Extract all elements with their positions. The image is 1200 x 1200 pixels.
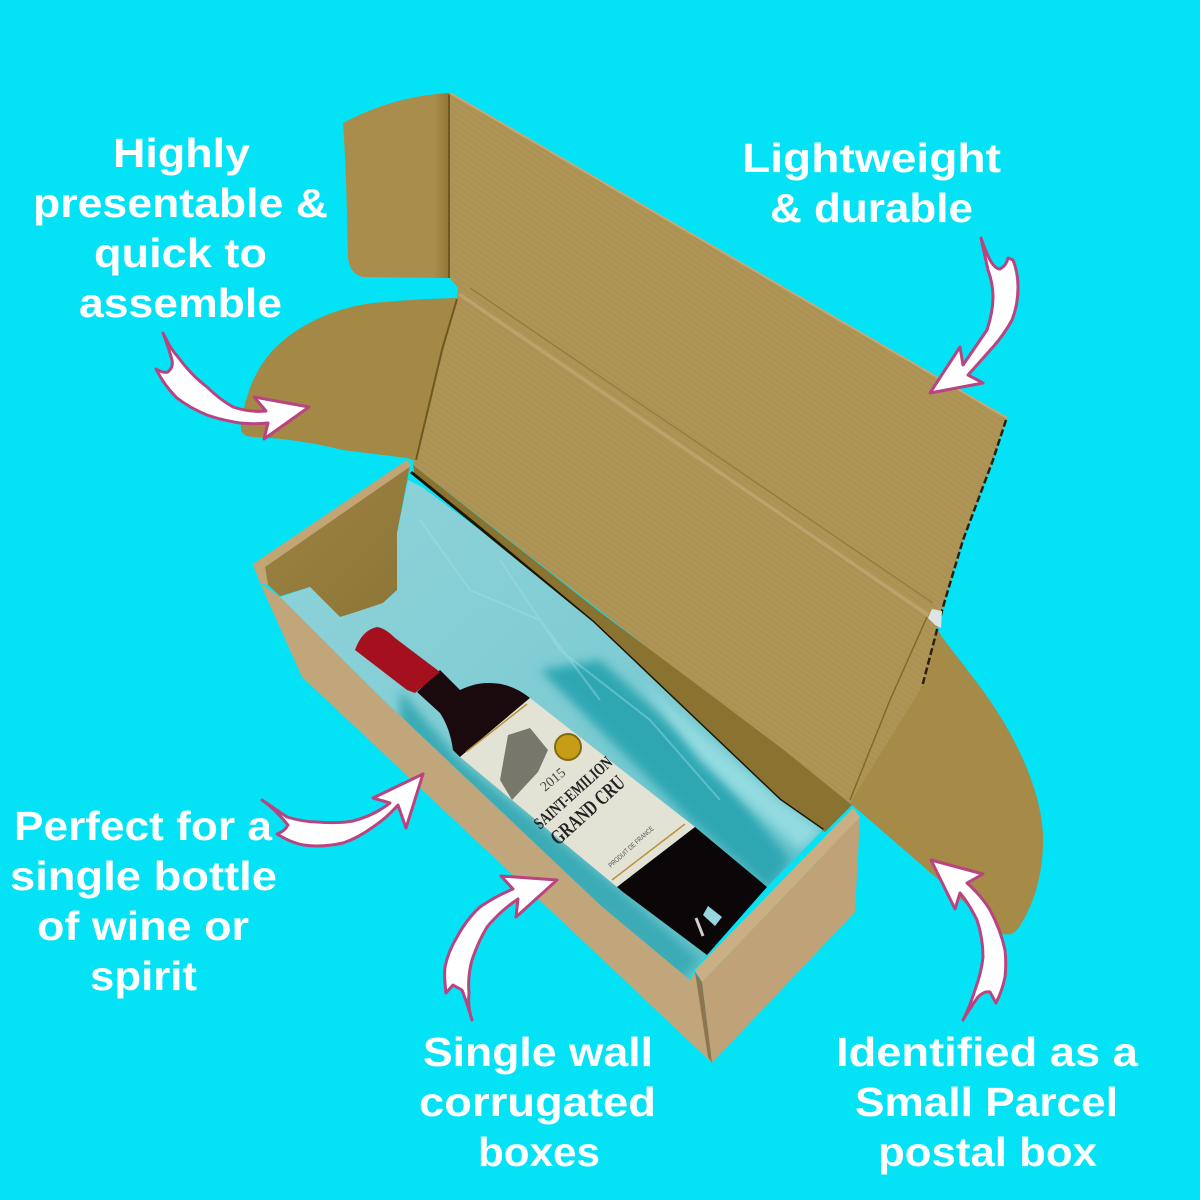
arrow: top right [930, 238, 1018, 393]
callout: single bottle: spirit [90, 953, 197, 999]
callout: single wall [419, 1029, 656, 1175]
callout: single wall: boxes [478, 1129, 600, 1175]
back panel crease [850, 617, 927, 800]
callout: small parcel [836, 1029, 1139, 1175]
label name: SAINT-EMILION [530, 752, 617, 833]
box inner left wall [265, 465, 410, 617]
bottle lower body [617, 827, 767, 955]
bottle capsule [355, 627, 440, 693]
callout: presentable: quick to [94, 230, 267, 276]
callout: presentable: presentable & [33, 180, 328, 226]
callout: single bottle: of wine or [37, 903, 249, 949]
cardboard box [241, 93, 1043, 1063]
corrugation texture [413, 93, 1007, 803]
tissue shading [400, 520, 823, 980]
label grand cru: GRAND CRU [545, 770, 630, 850]
box front wall [260, 583, 712, 1063]
callout: lightweight [742, 135, 1001, 231]
box right end wall [702, 817, 860, 1063]
tab fold shadow [416, 95, 457, 460]
bottle highlight [696, 918, 703, 936]
lid edge highlight [450, 93, 1007, 418]
label seal [555, 734, 581, 760]
label gold lines [466, 704, 685, 880]
left side flap [241, 298, 457, 462]
arrow: top left [156, 333, 309, 439]
callout: single bottle: Perfect for a [14, 803, 273, 849]
lid fold line [470, 288, 933, 603]
lid right edge [922, 420, 1006, 687]
corner shading [695, 972, 712, 1063]
light fold near back wall [650, 694, 823, 852]
callout: small parcel: Identified as a [836, 1029, 1139, 1075]
wine bottle [355, 627, 767, 955]
bottle label [460, 698, 695, 887]
arrow: bottom right [931, 860, 1006, 1020]
top left lid tab [343, 93, 450, 278]
corner tape [928, 609, 942, 628]
bottle neck and shoulder [417, 670, 530, 757]
arrow: left [262, 774, 423, 846]
arrows [156, 238, 1018, 1020]
inner fold band [413, 465, 852, 832]
right side flap [850, 625, 1043, 934]
callout: presentable [33, 130, 328, 326]
callout: lightweight: & durable [770, 185, 973, 231]
callout: presentable: Highly [113, 130, 250, 176]
callout: lightweight: Lightweight [742, 135, 1001, 181]
tissue creases [420, 520, 720, 800]
label product line: PRODUIT DE FRANCE [608, 825, 656, 869]
callout: single wall: corrugated [419, 1079, 656, 1125]
left inner wall rim [253, 460, 411, 585]
callout: small parcel: Small Parcel [855, 1079, 1118, 1125]
tissue paper [280, 480, 823, 980]
callout: presentable: assemble [79, 280, 282, 326]
callout: small parcel: postal box [878, 1129, 1097, 1175]
label chateau drawing [500, 728, 548, 800]
lid fold strip [459, 294, 928, 615]
bottle back mark [703, 906, 722, 926]
teal shadow beside front wall [400, 690, 700, 980]
teal shadow above bottle [540, 660, 790, 890]
callout: single bottle [10, 803, 277, 999]
callout: single wall: Single wall [423, 1029, 653, 1075]
label year: 2015 [538, 766, 569, 795]
open lid and back panel [413, 93, 1007, 803]
end wall rim [695, 808, 860, 982]
arrow: bottom middle [445, 876, 557, 1020]
inner fold dark line [411, 472, 823, 830]
callout: single bottle: single bottle [10, 853, 277, 899]
